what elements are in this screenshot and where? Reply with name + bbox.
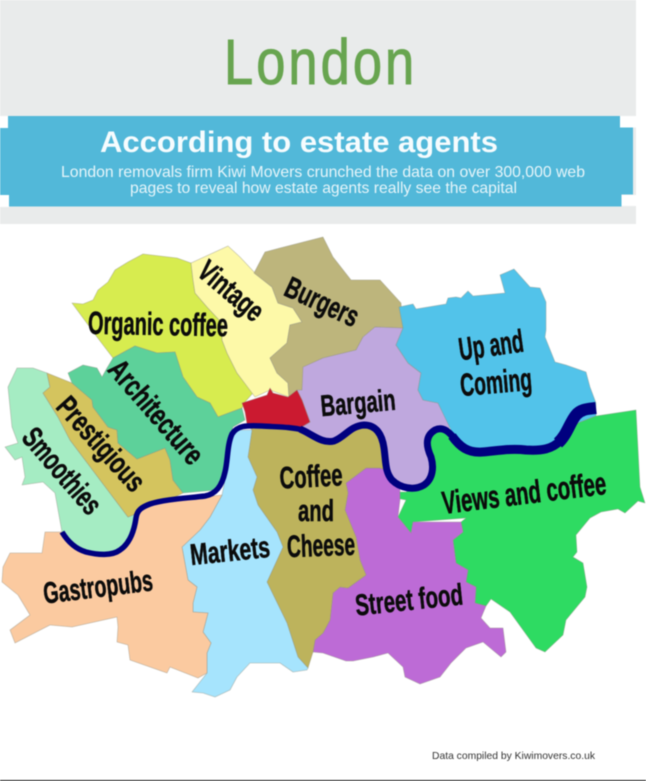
label: Coming: Coming: [459, 361, 533, 403]
region: central red: [242, 388, 310, 428]
label: Burgers: Burgers: [279, 271, 364, 334]
banner description: [61, 164, 585, 197]
map of London: [2, 237, 645, 697]
header panel: [0, 0, 636, 224]
region: Coffee and Cheese: [248, 425, 386, 668]
label: Architecture: Architecture: [101, 353, 210, 471]
region: Burgers: [254, 237, 403, 397]
label: Gastropubs: Gastropubs: [41, 564, 155, 611]
title: London: [224, 27, 414, 98]
label: Smoothies: Smoothies: [15, 421, 108, 521]
banner heading: According to estate agents: [100, 126, 498, 159]
label: Coffee and Cheese: Coffee: [279, 457, 343, 496]
label: Organic coffee: Organic coffee: [88, 305, 228, 343]
region: Views and coffee: [391, 410, 645, 652]
region: Bargain: [297, 327, 450, 488]
source credit: Data compiled by Kiwimovers.co.uk: [432, 750, 596, 762]
label: Prestigious: Prestigious: [50, 390, 152, 498]
region: Organic coffee: [72, 254, 253, 417]
river Thames: [62, 408, 596, 554]
label: Vintage: Vintage: [191, 254, 270, 328]
subtitle banner: [0, 116, 636, 207]
banner description: pages to reveal how estate agents really see the capital: [130, 180, 517, 197]
region: Markets: [182, 430, 308, 697]
label: Up and: Up and: [456, 323, 526, 367]
region: Prestigious: [43, 373, 183, 517]
region: Smoothies: [5, 368, 138, 554]
banner description: London removals firm Kiwi Movers crunched the data on over 300,000 web: [61, 164, 585, 181]
region: Vintage: [191, 246, 302, 397]
region: Architecture: [68, 346, 245, 493]
label: Coffee and Cheese: and: [298, 493, 334, 528]
label: Street food: Street food: [354, 578, 464, 623]
region: Street food: [313, 468, 506, 684]
region: Up and Coming: [396, 269, 596, 453]
label: Bargain: Bargain: [319, 384, 397, 423]
label: Coffee and Cheese: Cheese: [286, 527, 356, 564]
region: Gastropubs: [2, 495, 222, 678]
label: Markets: Markets: [189, 531, 272, 572]
label: Coffee and Cheese: [279, 457, 356, 564]
